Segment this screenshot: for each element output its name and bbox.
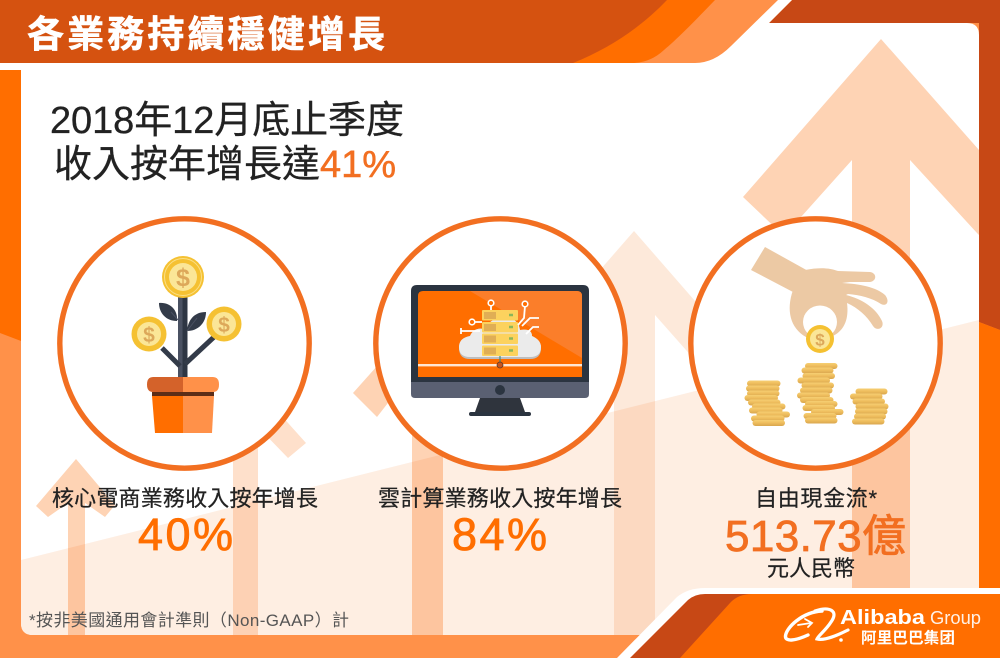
Alibaba Group logo: 阿里巴巴集团 bbox=[861, 628, 955, 647]
panel: free cash flow bbox=[691, 219, 940, 468]
icon: money plant: $ bbox=[176, 264, 190, 292]
icon: coin stacks bbox=[744, 363, 888, 426]
circle ring bbox=[60, 219, 309, 468]
headline: 2018年12月底止季度 bbox=[50, 100, 404, 142]
footnote: *按非美國通用會計準則（Non-GAAP）計 bbox=[29, 611, 349, 630]
icon: Alibaba swoosh bbox=[785, 609, 848, 642]
icon: money plant: $ bbox=[218, 314, 230, 337]
headline: 收入按年增長達41% bbox=[54, 144, 396, 186]
label: cloud growth: 雲計算業務收入按年增長 bbox=[378, 486, 622, 511]
label: cloud growth: 84% bbox=[452, 509, 547, 560]
footer banner bbox=[617, 588, 1000, 658]
label: free cash flow: 513.73億 bbox=[725, 512, 906, 561]
top header banner bbox=[0, 0, 778, 63]
panel: core commerce bbox=[60, 219, 309, 468]
label: free cash flow: 元人民幣 bbox=[767, 556, 855, 581]
Alibaba Group logo: Group bbox=[930, 608, 981, 628]
circle ring bbox=[376, 219, 625, 468]
panel: cloud computing bbox=[376, 219, 625, 468]
label: core commerce growth: 核心電商業務收入按年增長 bbox=[52, 486, 318, 511]
icon: hand dropping coin bbox=[751, 247, 888, 353]
icon: money plant: $ bbox=[143, 324, 155, 347]
icon: monitor with cloud server bbox=[411, 285, 589, 416]
label: free cash flow bbox=[725, 486, 906, 581]
circle ring bbox=[691, 219, 940, 468]
headline bbox=[50, 100, 404, 186]
icon: money plant bbox=[132, 256, 242, 433]
label: core commerce growth bbox=[52, 486, 318, 560]
Alibaba Group logo bbox=[785, 607, 981, 647]
label: free cash flow: 自由現金流* bbox=[755, 486, 877, 511]
icon: hand dropping coin: $ bbox=[815, 330, 825, 350]
label: core commerce growth: 40% bbox=[138, 509, 233, 560]
logo wordmark: Alibaba bbox=[840, 607, 926, 629]
title: 各業務持續穩健增長 bbox=[27, 14, 385, 55]
label: cloud growth bbox=[378, 486, 622, 560]
